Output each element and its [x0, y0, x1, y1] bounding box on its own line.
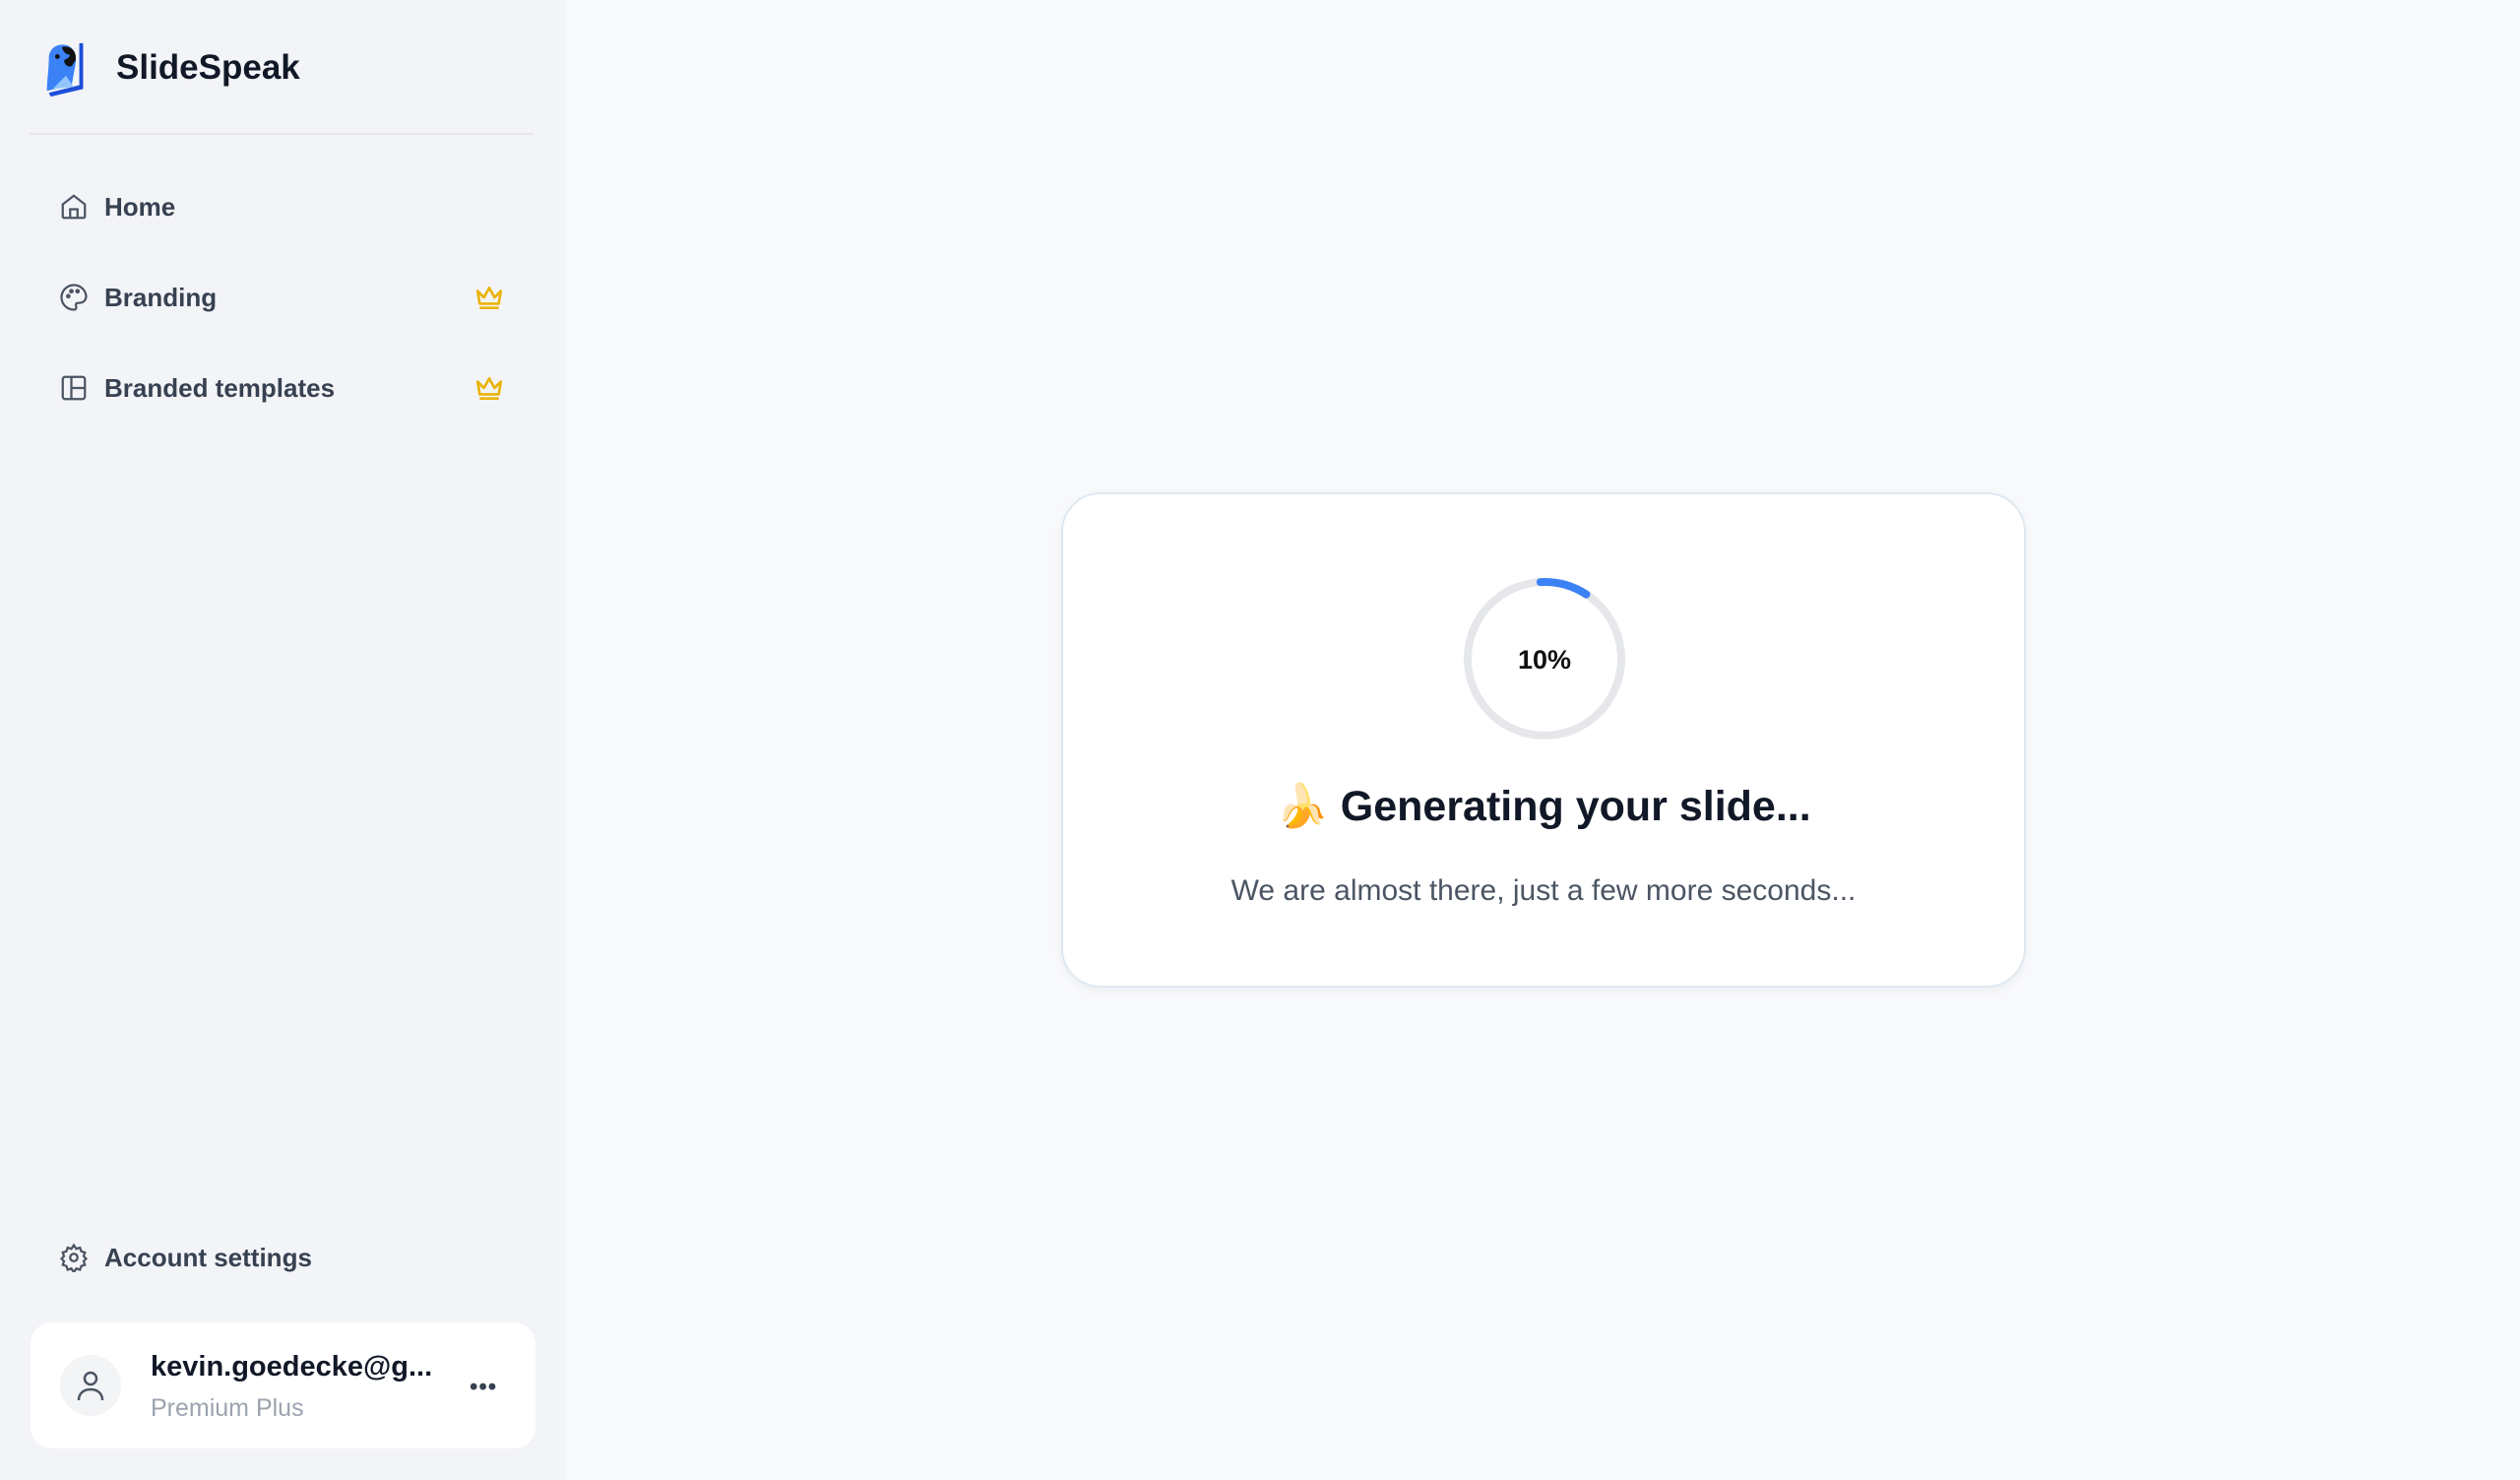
nav: branded templates: Branded templates	[104, 372, 335, 402]
progress ring: 10%	[1518, 645, 1571, 675]
sidebar	[0, 0, 566, 1480]
email: kevin.goedecke@g...	[151, 1351, 432, 1383]
subtitle: We are almost there, just a few more seconds...	[1231, 874, 1856, 907]
plan: Premium Plus	[151, 1394, 304, 1422]
nav: account settings: Account settings	[104, 1243, 312, 1272]
icon: crown	[476, 287, 502, 309]
title: 🍌 Generating your slide...	[1276, 783, 1811, 830]
user card	[31, 1322, 536, 1448]
icon: crown	[476, 377, 502, 400]
nav: home	[61, 191, 175, 221]
nav: branding: Branding	[104, 282, 217, 311]
logo	[47, 43, 300, 97]
avatar	[60, 1355, 121, 1416]
nav: branding	[60, 282, 502, 311]
nav: home: Home	[104, 191, 175, 221]
nav: branded templates	[61, 372, 502, 402]
logo: SlideSpeak	[116, 48, 300, 87]
progress ring	[1464, 578, 1625, 740]
menu dots: •••	[470, 1374, 497, 1400]
loading card	[1061, 492, 2026, 988]
